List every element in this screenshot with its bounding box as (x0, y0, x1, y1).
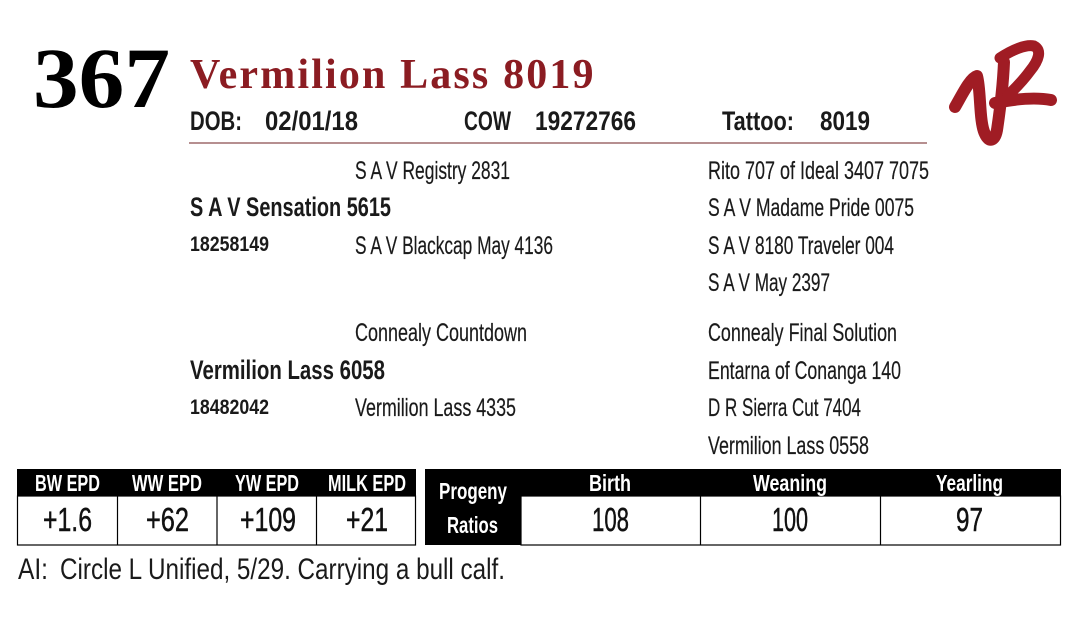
EPD table: MILK EPD (328, 470, 406, 496)
progeny ratios table (425, 469, 1061, 545)
registration row: 02/01/18 (265, 106, 358, 136)
pedigree: sire side: S A V Blackcap May 4136 (355, 232, 553, 260)
lot number: 367 (33, 30, 170, 126)
pedigree: dam side: Connealy Final Solution (708, 319, 897, 347)
progeny ratios table: 108 (592, 501, 629, 538)
pedigree: dam side: Vermilion Lass 4335 (355, 394, 516, 422)
EPD table (17, 469, 416, 545)
EPD table: BW EPD (35, 470, 100, 496)
EPD table: WW EPD (132, 470, 202, 496)
registration row: Tattoo: (722, 106, 794, 136)
AI breeding note: Circle L Unified, 5/29. Carrying a bull calf. (60, 553, 505, 586)
icon: VR brand logo (955, 46, 1051, 140)
registration row (190, 106, 870, 136)
pedigree: sire side: Rito 707 of Ideal 3407 7075 (708, 157, 929, 185)
progeny ratios table: 100 (772, 501, 808, 538)
EPD table: +21 (346, 501, 388, 538)
pedigree: dam side: Vermilion Lass 6058 (190, 355, 385, 385)
pedigree: dam side: 18482042 (190, 396, 269, 419)
progeny ratios table: Ratios (447, 512, 498, 538)
title: Vermilion Lass 8019 (190, 52, 595, 98)
progeny ratios table: Weaning (753, 470, 827, 496)
progeny ratios table: Yearling (936, 470, 1003, 496)
pedigree: sire side: S A V May 2397 (708, 269, 830, 297)
pedigree: sire side: S A V 8180 Traveler 004 (708, 232, 894, 260)
registration row: DOB: (190, 106, 242, 136)
registration row: 8019 (820, 106, 870, 136)
pedigree: dam side (190, 319, 901, 460)
progeny ratios table: 97 (956, 501, 983, 538)
progeny ratios table: Birth (589, 470, 631, 496)
EPD table: +109 (240, 501, 296, 538)
registration row: COW (464, 106, 511, 136)
pedigree: dam side: Entarna of Conanga 140 (708, 357, 901, 385)
EPD table: +1.6 (43, 501, 92, 538)
EPD table: YW EPD (235, 470, 299, 496)
pedigree: sire side: S A V Registry 2831 (355, 157, 510, 185)
AI breeding note: AI: (18, 553, 48, 586)
registration row: 19272766 (535, 106, 636, 136)
pedigree: dam side: Vermilion Lass 0558 (708, 432, 869, 460)
pedigree: sire side: 18258149 (190, 233, 269, 256)
pedigree: sire side: S A V Madame Pride 0075 (708, 194, 914, 222)
pedigree: dam side: Connealy Countdown (355, 319, 527, 347)
EPD table: +62 (146, 501, 189, 538)
progeny ratios table: Progeny (439, 478, 507, 504)
pedigree: sire side (190, 157, 929, 297)
pedigree: dam side: D R Sierra Cut 7404 (708, 394, 861, 422)
pedigree: sire side: S A V Sensation 5615 (190, 192, 391, 222)
